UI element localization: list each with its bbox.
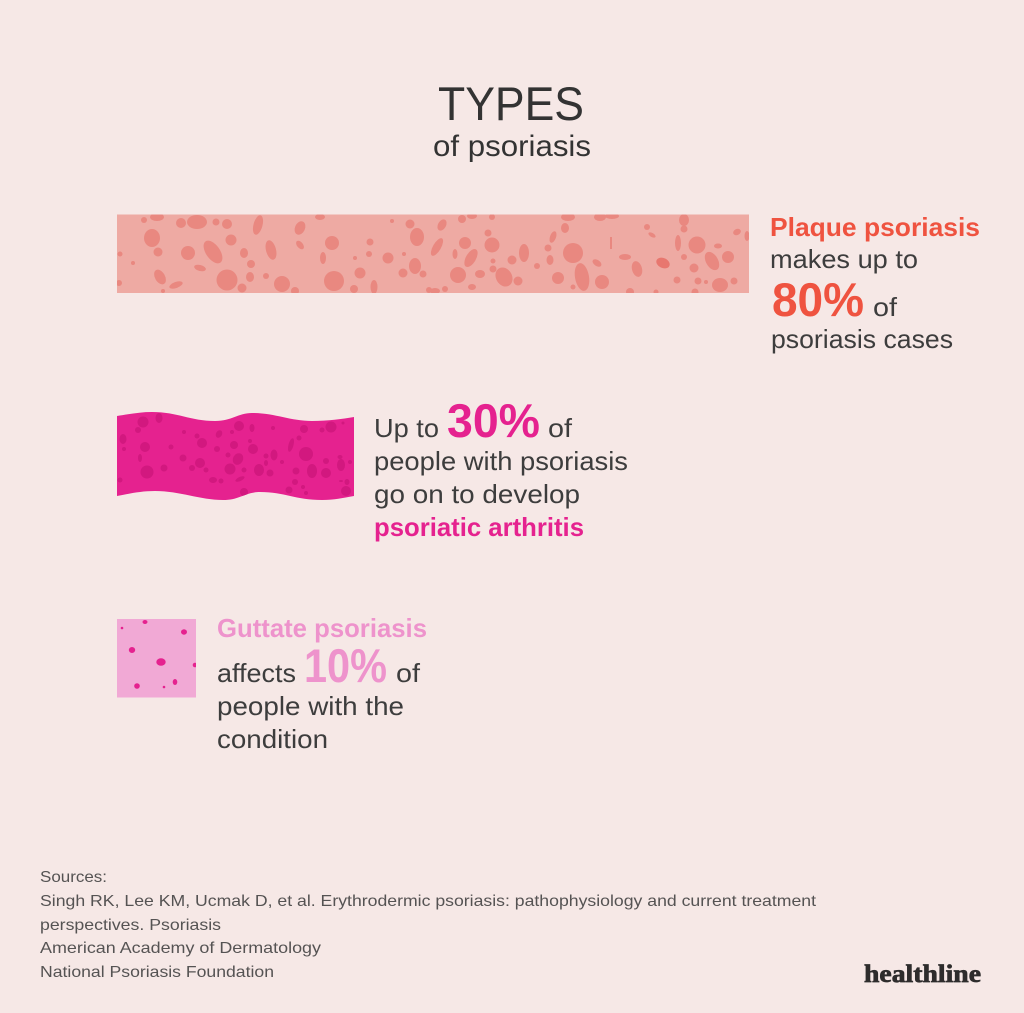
text: guttate psoriasis [217, 613, 427, 754]
text: psoriatic arthritis: people with psoriasis [374, 446, 628, 476]
logo: healthline: healthline [864, 961, 981, 988]
text: psoriatic arthritis [374, 394, 628, 542]
text: guttate psoriasis: 10% [304, 639, 387, 692]
text: guttate psoriasis: people with the [217, 691, 404, 721]
text: guttate psoriasis: condition [217, 724, 328, 754]
sources [40, 869, 817, 981]
text: plaque psoriasis: of [873, 292, 898, 322]
bar: plaque psoriasis texture, 80% [116, 213, 750, 296]
sources: National Psoriasis Foundation [40, 964, 274, 981]
text: plaque psoriasis: Plaque psoriasis [770, 212, 980, 242]
sources: American Academy of Dermatology [40, 940, 321, 957]
title: of psoriasis [433, 130, 591, 163]
sources: perspectives. Psoriasis [40, 917, 221, 934]
text: plaque psoriasis [770, 212, 980, 354]
text: guttate psoriasis: affects [217, 658, 296, 688]
text: guttate psoriasis: of [396, 658, 421, 688]
text: plaque psoriasis: psoriasis cases [771, 324, 953, 354]
title [433, 77, 591, 163]
sources: Singh RK, Lee KM, Ucmak D, et al. Erythrodermic psoriasis: pathophysiology and current treatment [40, 893, 817, 910]
text: psoriatic arthritis: 30% [447, 394, 540, 447]
sources: Sources: [40, 869, 107, 886]
text: psoriatic arthritis: psoriatic arthritis [374, 512, 584, 542]
text: psoriatic arthritis: Up to [374, 413, 439, 443]
text: psoriatic arthritis: of [548, 413, 573, 443]
text: psoriatic arthritis: go on to develop [374, 479, 580, 509]
wave bar: psoriatic arthritis texture, 30% [117, 412, 354, 500]
title: TYPES [438, 77, 584, 130]
square: guttate psoriasis texture, 10% [117, 619, 197, 698]
text: guttate psoriasis: Guttate psoriasis [217, 613, 427, 643]
text: plaque psoriasis: 80% [772, 273, 864, 326]
text: plaque psoriasis: makes up to [770, 244, 918, 274]
